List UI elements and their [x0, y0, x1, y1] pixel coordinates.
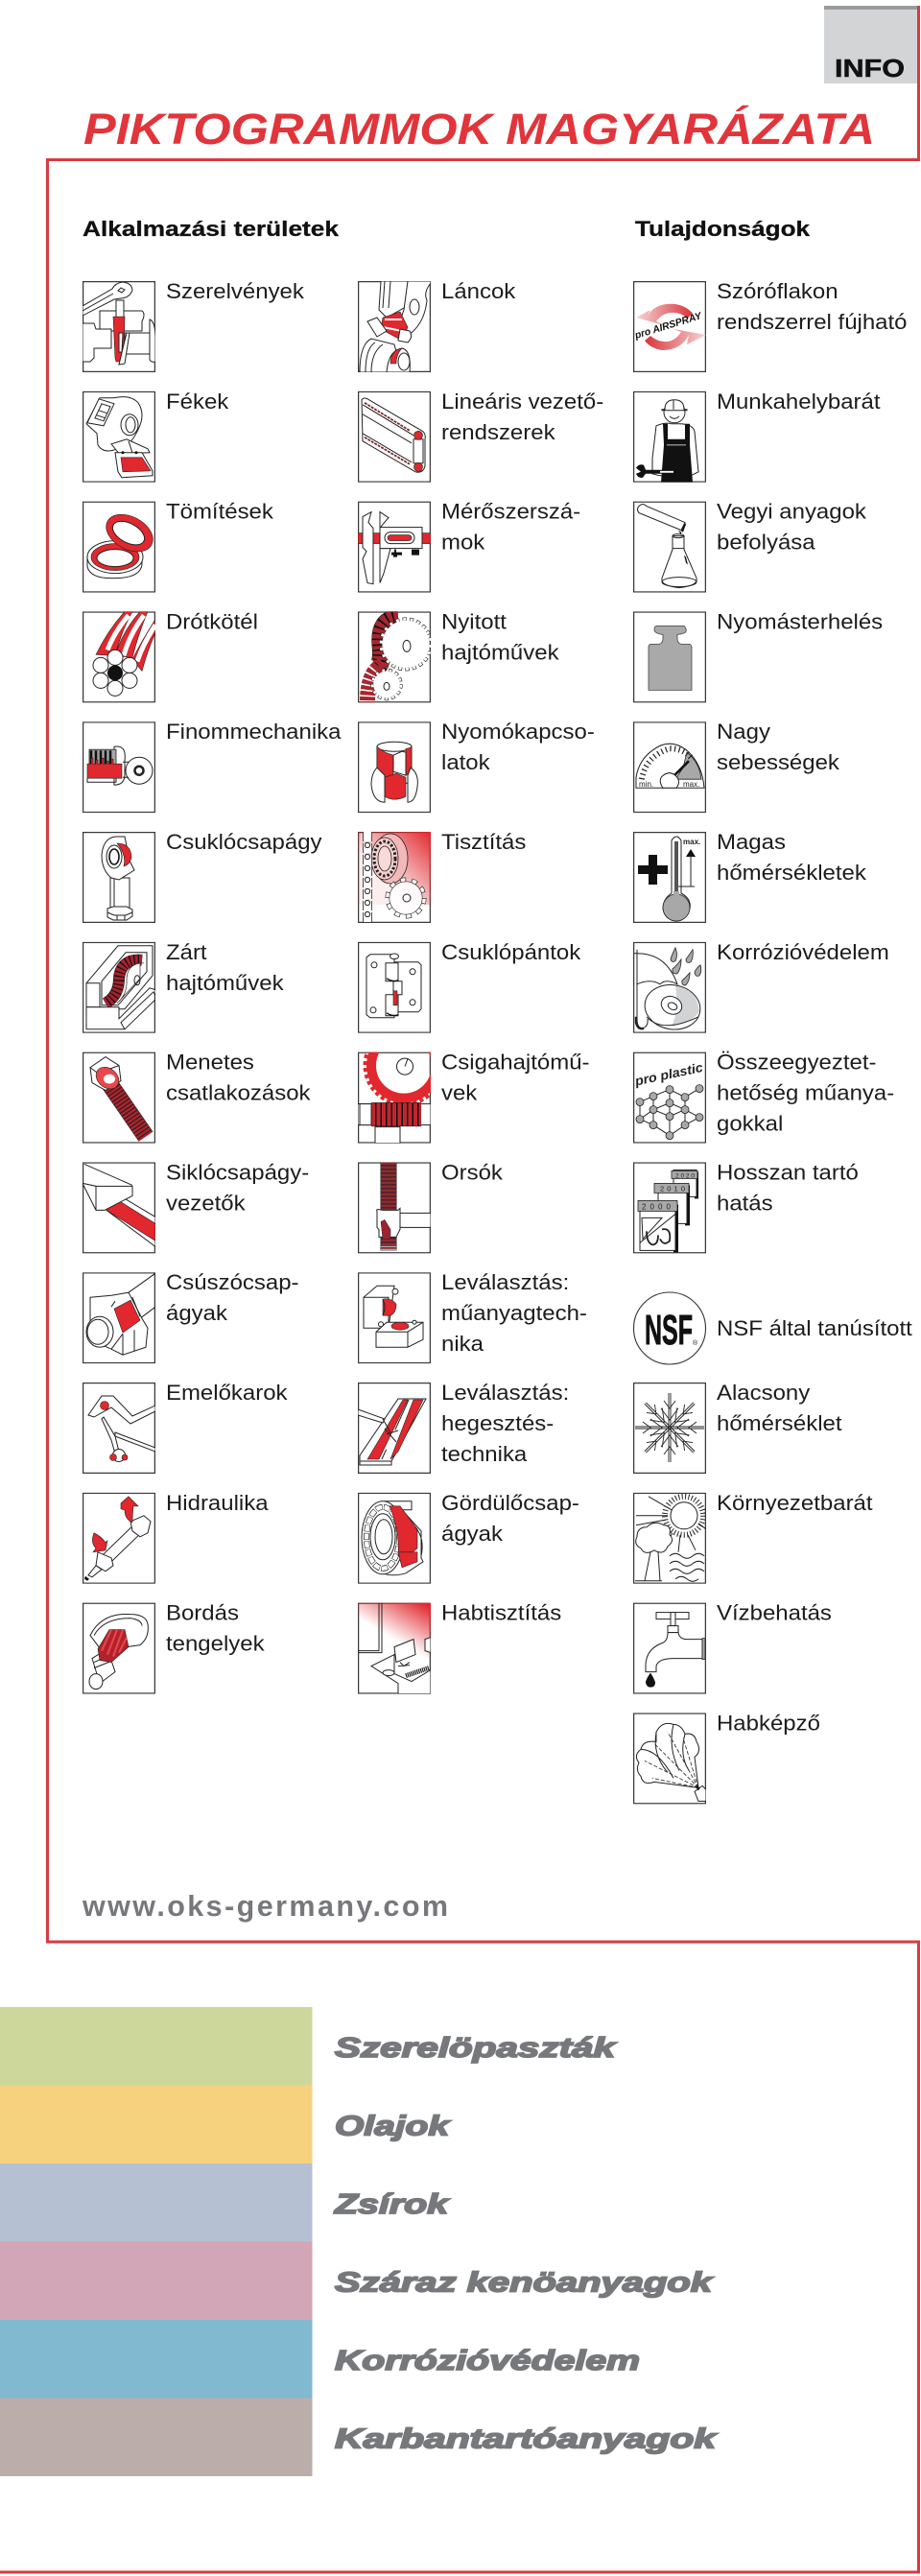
label: gokkal: [717, 1112, 783, 1135]
item: Tisztítás: [358, 830, 526, 923]
item: Korrózióvédelem: [634, 940, 889, 1033]
label: Drótkötél: [166, 609, 258, 633]
item: Alacsony hőmérséklet: [634, 1381, 842, 1473]
item: Fékek: [83, 390, 229, 482]
item: Szóróflakon rendszerrel fújható: [632, 279, 908, 371]
item: Csuklócsapágy: [83, 830, 322, 922]
label: Leválasztás:: [441, 1270, 569, 1294]
icon: brake: [83, 391, 155, 483]
legend: Olajok: Olajok: [335, 2111, 451, 2141]
item: Leválasztás: hegesztéstechnika: [358, 1381, 569, 1473]
item: Hosszan tartó hatás: [634, 1160, 859, 1253]
icon: caliper: [358, 501, 431, 593]
icon: closed gearbox: [83, 942, 155, 1033]
icon: pro airspray: pro AIRSPRAY: [632, 310, 704, 342]
label: ágyak: [441, 1522, 503, 1546]
item: Zárt hajtóművek: [83, 940, 284, 1032]
label: Nyomásterhelés: [717, 609, 883, 633]
icon: foam cleaning: [358, 1602, 431, 1694]
heading: application areas: Alkalmazási területek: [83, 217, 340, 241]
icon: tap: [633, 1602, 706, 1694]
label: technika: [441, 1442, 527, 1466]
label: hőmérséklet: [717, 1411, 842, 1435]
label: Nagy: [717, 720, 770, 744]
label: Habképző: [717, 1711, 820, 1735]
icon: foam spray: [633, 1713, 706, 1804]
icon: thermometer: max.: [683, 838, 700, 846]
label: Csuklócsapágy: [166, 830, 322, 854]
item: Nagy sebességek: [634, 720, 839, 813]
label: mok: [441, 531, 485, 554]
label: hőmérsékletek: [717, 861, 866, 885]
product legend: [0, 2007, 719, 2476]
label: Zárt: [166, 940, 207, 964]
legend: Olajok: [0, 2086, 451, 2163]
item: Láncok: [359, 279, 516, 372]
item: Vegyi anyagok befolyása: [634, 500, 866, 592]
item: Drótkötél: [83, 609, 258, 702]
label: hajtóművek: [441, 640, 559, 664]
icon: plain bearing: [83, 1272, 155, 1364]
label: Gördülőcsap-: [441, 1491, 579, 1515]
label: Lineáris vezető-: [441, 390, 603, 414]
item: Vízbehatás: [634, 1601, 832, 1693]
label: Bordás: [166, 1601, 239, 1624]
icon: calendars: 2010: [660, 1184, 685, 1193]
icon: environment: [633, 1493, 706, 1584]
legend: Zsírok: [0, 2163, 451, 2241]
icon: corrosion protection: [633, 942, 706, 1033]
item: Mérőszerszámok: [358, 500, 580, 592]
label: Környezetbarát: [717, 1491, 873, 1515]
label: Leválasztás:: [441, 1381, 569, 1405]
icon: NSF badge: NSF: [645, 1307, 693, 1354]
icon: worker: [633, 391, 706, 483]
legend: Zsírok: Zsírok: [334, 2189, 451, 2220]
icon: calendars: [633, 1162, 706, 1253]
INFO tab: [824, 6, 918, 83]
label: Láncok: [441, 279, 516, 303]
label: Alacsony: [717, 1381, 811, 1405]
label: Magas: [717, 830, 786, 854]
website URL: www.oks-germany.com: [82, 1890, 448, 1923]
label: Finommechanika: [166, 720, 342, 744]
item: Nyitott hajtóművek: [359, 609, 559, 702]
item: Leválasztás: műanyagtechnika: [359, 1270, 587, 1363]
label: Csuklópántok: [441, 940, 581, 964]
label: latok: [441, 750, 490, 774]
label: NSF által tanúsított: [717, 1316, 912, 1340]
legend: Szerelöpaszták: Szerelöpaszták: [335, 2033, 618, 2064]
label: Menetes: [166, 1051, 254, 1074]
label: Munkahelybarát: [717, 390, 881, 414]
icon: seals: [83, 501, 155, 593]
item: Nyomókapcsolatok: [359, 720, 595, 813]
icon: thrust coupling: [358, 721, 431, 814]
icon: cleaning: [358, 832, 431, 923]
icon: chain: [358, 281, 431, 372]
label: hetőség műanya-: [717, 1081, 894, 1104]
item: Habképző: [634, 1711, 820, 1804]
item: Nyomásterhelés: [634, 609, 883, 702]
label: Csigahajtómű-: [441, 1051, 590, 1074]
column: application areas 2: [358, 279, 603, 1694]
icon: pro plastic molecule: pro plastic: [632, 1060, 705, 1089]
label: vek: [441, 1081, 478, 1104]
icon: worm gear: [358, 1052, 431, 1144]
item: Finommechanika: [83, 720, 342, 813]
title: PIKTOGRAMMOK MAGYARÁZATA: [83, 105, 875, 154]
label: Korrózióvédelem: [717, 940, 889, 964]
label: Vízbehatás: [717, 1601, 832, 1624]
item: Lineáris vezetőrendszerek: [359, 390, 603, 482]
item: Menetes csatlakozások: [83, 1051, 311, 1143]
icon: chemical flask: [633, 501, 706, 593]
INFO tab: INFO: [835, 54, 905, 83]
label: Csúszócsap-: [166, 1270, 299, 1294]
label: Mérőszerszá-: [441, 500, 580, 523]
label: hajtóművek: [166, 971, 284, 995]
label: Szóróflakon: [717, 279, 838, 303]
icon: thermometer: [633, 832, 706, 923]
label: sebességek: [717, 750, 839, 774]
icon: wire rope: [83, 611, 155, 702]
icon: lead screw: [358, 1162, 431, 1253]
icon: speed gauge: min.: [639, 780, 653, 789]
label: Nyomókapcso-: [441, 720, 595, 744]
icon: splined shaft: [83, 1602, 155, 1694]
icon: hydraulic cylinder: [83, 1493, 155, 1584]
item: Csuklópántok: [359, 940, 581, 1032]
legend: Karbantartóanyagok: [0, 2399, 719, 2476]
legend: Száraz kenöanyagok: [0, 2241, 715, 2320]
item: Csigahajtóművek: [358, 1028, 590, 1144]
item: Összeegyeztethetőség műanyagokkal: [632, 1051, 894, 1143]
icon: lock and key: [83, 721, 155, 814]
label: Siklócsapágy-: [166, 1160, 309, 1184]
item: Környezetbarát: [634, 1491, 873, 1583]
icon: roller bearing: [358, 1493, 431, 1584]
legend: Korrózióvédelem: Korrózióvédelem: [335, 2346, 640, 2376]
legend: Korrózióvédelem: [0, 2320, 640, 2399]
label: csatlakozások: [166, 1081, 311, 1104]
icon: calendars: 2020: [675, 1172, 695, 1179]
label: Fékek: [166, 390, 229, 414]
legend: Száraz kenöanyagok: Száraz kenöanyagok: [335, 2268, 715, 2299]
label: hatás: [717, 1191, 773, 1215]
label: Összeegyeztet-: [717, 1051, 877, 1074]
item: Munkahelybarát: [634, 390, 881, 483]
label: nika: [441, 1332, 484, 1356]
label: Tisztítás: [441, 830, 526, 854]
icon: calendars: 2000: [642, 1202, 672, 1211]
label: műanyagtech-: [441, 1301, 587, 1325]
item: Siklócsapágy-vezetők: [83, 1160, 309, 1253]
icon: plastic mould: [358, 1272, 431, 1364]
item: Bordás tengelyek: [83, 1601, 265, 1693]
icon: linear guide: [358, 391, 431, 483]
icon: snowflake: [633, 1383, 706, 1474]
item: Gördülőcsapágyak: [359, 1491, 579, 1583]
item: Emelőkarok: [83, 1381, 288, 1473]
label: Emelőkarok: [166, 1381, 288, 1405]
icon: NSF badge: [633, 1292, 706, 1364]
icon: speed gauge: max.: [683, 780, 699, 789]
item: Tömítések: [83, 500, 273, 592]
icon: speed gauge: [633, 721, 706, 814]
item: Szerelvények: [83, 279, 304, 371]
label: vezetők: [166, 1191, 246, 1215]
label: Tömítések: [166, 500, 273, 523]
label: Habtisztítás: [441, 1601, 561, 1624]
icon: pro airspray: [632, 281, 706, 372]
icon: threaded bolt: [83, 1052, 155, 1144]
icon: welding: [358, 1383, 431, 1474]
item: Hidraulika: [83, 1491, 269, 1583]
label: Hidraulika: [166, 1491, 269, 1515]
icon: valve: [83, 281, 155, 372]
icon: open gears: [358, 611, 431, 702]
item: Orsók: [359, 1160, 503, 1253]
label: rendszerek: [441, 420, 555, 444]
label: rendszerrel fújható: [717, 310, 908, 334]
icon: NSF badge: ®: [693, 1339, 698, 1347]
item: Magas hőmérsékletek: [634, 830, 866, 922]
column: application areas 1: [83, 279, 342, 1693]
label: tengelyek: [166, 1632, 265, 1655]
heading: properties: Tulajdonságok: [635, 217, 811, 241]
label: befolyása: [717, 531, 815, 554]
item: Habtisztítás: [358, 1601, 561, 1694]
item: Csúszócsapágyak: [83, 1270, 299, 1363]
icon: slide guide: [83, 1162, 155, 1253]
icon: pro plastic molecule: [632, 1052, 706, 1144]
icon: hinge: [358, 942, 431, 1033]
icon: lever: [83, 1383, 155, 1474]
label: Hosszan tartó: [717, 1160, 859, 1184]
item: NSF által tanúsított: [633, 1292, 912, 1364]
label: Vegyi anyagok: [717, 500, 866, 523]
legend: Karbantartóanyagok: Karbantartóanyagok: [335, 2423, 719, 2454]
label: Nyitott: [441, 609, 508, 633]
icon: weight: [633, 611, 706, 702]
label: Szerelvények: [166, 279, 304, 303]
legend: Szerelöpaszták: [0, 2007, 618, 2086]
label: Orsók: [441, 1160, 503, 1184]
label: hegesztés-: [441, 1411, 554, 1435]
icon: rod end bearing: [83, 832, 155, 923]
column: properties: [632, 279, 912, 1804]
label: ágyak: [166, 1301, 227, 1325]
